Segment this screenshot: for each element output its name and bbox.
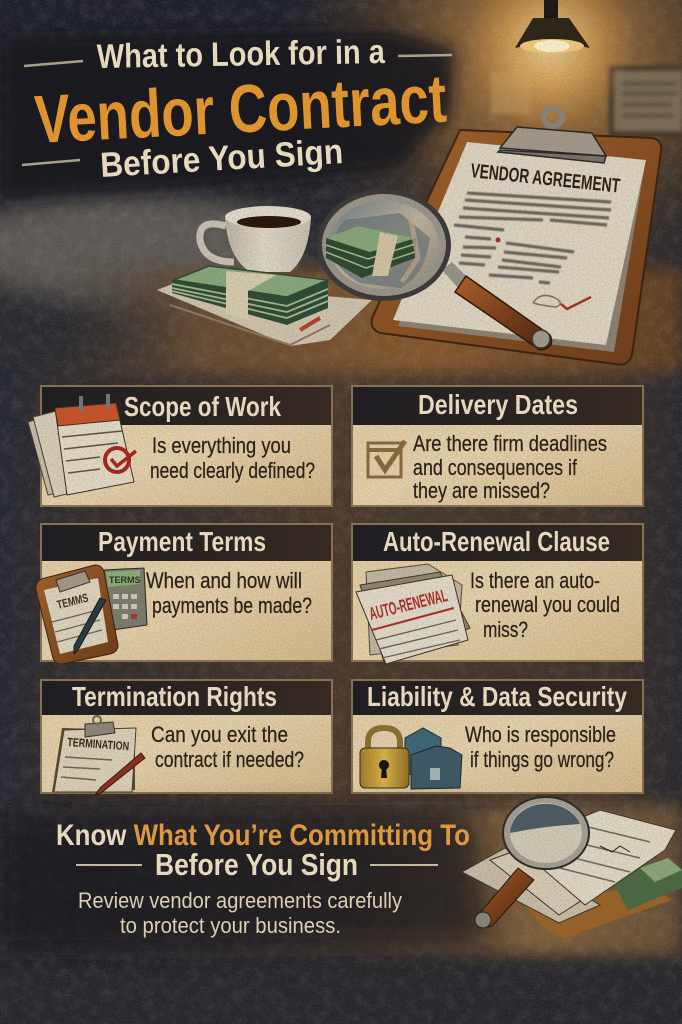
- body text: Are there firm deadlines: [413, 431, 607, 456]
- icon: calendar with check: [28, 394, 136, 497]
- heading: Termination Rights: [72, 681, 277, 712]
- body text: contract if needed?: [155, 747, 304, 772]
- footer band: [0, 810, 490, 950]
- heading: Delivery Dates: [418, 389, 578, 420]
- body text: they are missed?: [413, 478, 550, 503]
- icon: hanging lamp: [465, 0, 635, 130]
- body text: Is there an auto-: [470, 568, 600, 593]
- icon: checkbox: [368, 441, 405, 477]
- panel: scope of work: [28, 385, 333, 507]
- panel: termination rights: [40, 679, 333, 795]
- title backing brush: [0, 30, 455, 200]
- body text: When and how will: [146, 568, 302, 593]
- footer body text: to protect your business.: [120, 913, 341, 938]
- body text: renewal you could: [475, 592, 620, 617]
- footer heading: Before You Sign: [155, 847, 358, 882]
- panel: payment terms: [36, 523, 333, 664]
- icon: calculator: TERMS: [109, 575, 140, 585]
- body text: need clearly defined?: [150, 458, 315, 483]
- coffee cup: [200, 206, 311, 272]
- title line 1: What to Look for in a: [96, 33, 386, 76]
- body text: Who is responsible: [465, 722, 616, 747]
- signature and check mark: [533, 295, 591, 309]
- heading: Scope of Work: [124, 391, 281, 422]
- body text: Can you exit the: [151, 722, 288, 747]
- title line 2: Vendor Contract: [33, 61, 448, 158]
- body text: Is everything you: [152, 433, 291, 458]
- panel: delivery dates: [351, 385, 644, 507]
- icon: clipboard with pen: [36, 565, 118, 664]
- icon: auto-renewal document: [356, 564, 470, 665]
- title: [22, 33, 452, 185]
- icon: clipboard with pen: TEMMS: [55, 591, 90, 612]
- document text lines: [454, 193, 611, 283]
- icon: calculator: [104, 568, 147, 630]
- magnified money: [326, 226, 416, 278]
- title line 3: Before You Sign: [99, 132, 344, 185]
- body text: miss?: [483, 617, 528, 642]
- icon: termination document with pen: [52, 716, 145, 795]
- clipboard with vendor agreement: [372, 108, 661, 365]
- heading: Auto-Renewal Clause: [383, 526, 610, 557]
- footer magnifier: [474, 797, 589, 928]
- footer body text: Review vendor agreements carefully: [78, 888, 402, 913]
- panel: auto-renewal clause: [351, 523, 644, 665]
- icon: padlock, shield and folder: [360, 728, 462, 789]
- body text: and consequences if: [413, 455, 578, 480]
- wall board: notices: [400, 66, 682, 136]
- icon: auto-renewal document: AUTO-RENEWAL: [367, 585, 450, 624]
- footer heading: Know What You’re Committing To: [56, 819, 470, 852]
- body text: if things go wrong?: [470, 747, 614, 772]
- clipboard clip: [498, 108, 606, 163]
- magnifying glass: [317, 189, 552, 350]
- heading: Payment Terms: [98, 526, 266, 557]
- footer illustration: magnifier over papers: [462, 797, 682, 938]
- panel: liability and data security: [351, 679, 644, 794]
- body text: payments be made?: [152, 593, 312, 618]
- money stack on papers: [157, 266, 372, 346]
- heading: Liability & Data Security: [367, 681, 627, 712]
- icon: termination document with pen: TERMINATION: [67, 735, 130, 753]
- footer heading: [56, 819, 470, 882]
